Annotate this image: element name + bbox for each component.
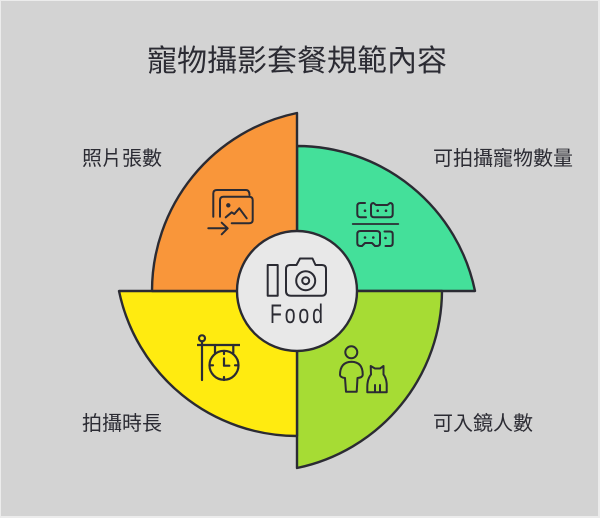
icon: photos with arrow	[208, 190, 253, 234]
segment: yellow	[119, 291, 297, 436]
segment: orange	[152, 113, 297, 291]
icon: hanging clock sign	[197, 335, 240, 380]
icon: pets	[353, 203, 398, 246]
title: 寵物攝影套餐規範內容	[147, 45, 447, 78]
icon: camera	[268, 258, 326, 296]
segment: lime	[297, 291, 442, 468]
label: people allowed: 可入鏡人數	[433, 412, 533, 435]
icon: person and cat	[340, 346, 387, 392]
center hub	[237, 231, 357, 351]
label: shooting duration: 拍攝時長	[82, 412, 162, 435]
hub text: Food	[270, 299, 326, 329]
label: photo count: 照片張數	[82, 147, 162, 170]
segment: green	[297, 146, 475, 291]
label: pets allowed: 可拍攝寵物數量	[433, 147, 573, 170]
